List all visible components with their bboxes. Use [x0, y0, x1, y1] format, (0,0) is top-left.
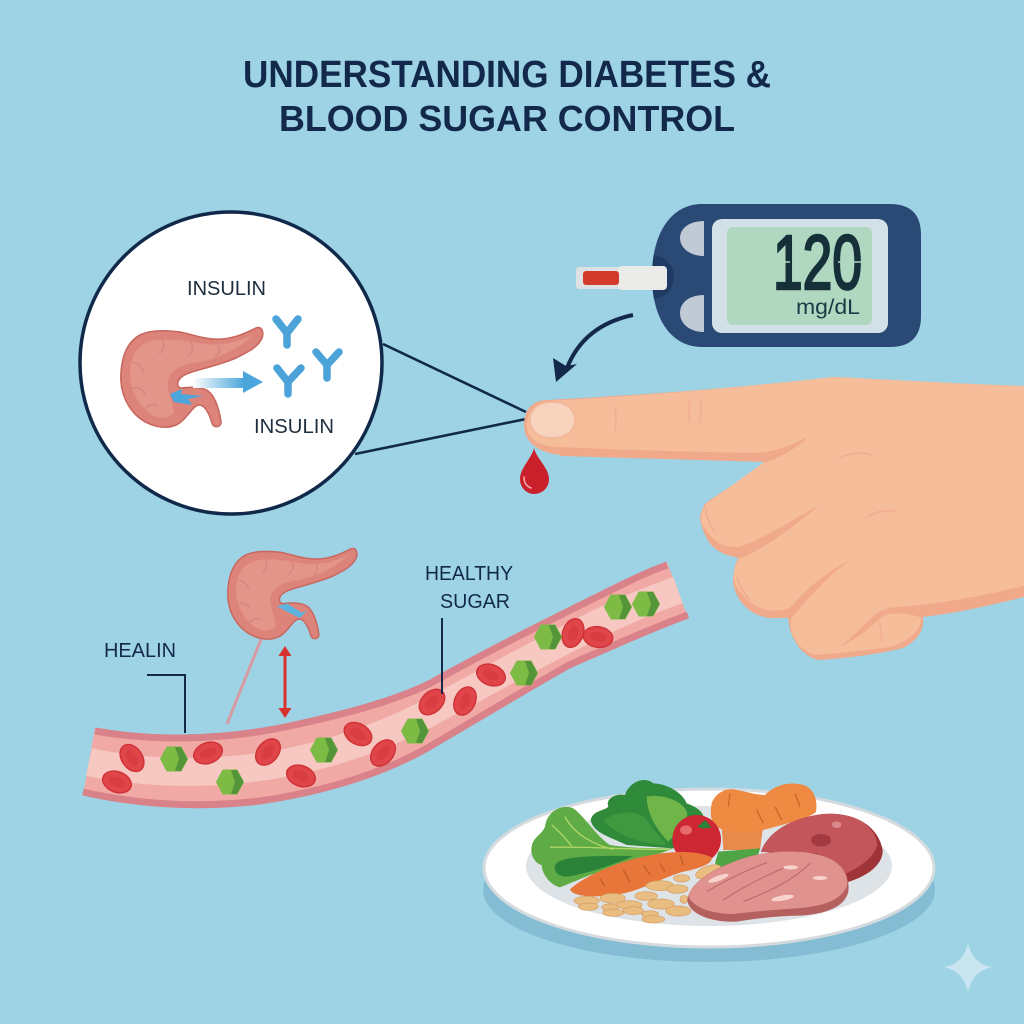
- tomato: [672, 815, 721, 864]
- glucose meter: [576, 204, 921, 347]
- green garnish: [715, 848, 760, 870]
- icon: pancreatic duct: [170, 389, 203, 405]
- pancreas connected to vessel: [227, 549, 357, 724]
- plate of food: [483, 780, 935, 962]
- label: HEALIN with leader: [104, 640, 185, 733]
- ham slice: [687, 852, 849, 922]
- glucose hexagons: [160, 592, 660, 794]
- plate well: [526, 806, 892, 926]
- icon: insulin molecules: [276, 319, 339, 394]
- title: BLOOD SUGAR CONTROL: [279, 98, 735, 139]
- hand creases: [560, 437, 923, 647]
- title: [243, 54, 771, 139]
- plate: [484, 789, 934, 947]
- meter buttons: [680, 221, 704, 332]
- meter screen: [712, 219, 888, 333]
- label: HEALTHY SUGAR with leader: SUGAR: [440, 591, 510, 613]
- icon: small pancreas: [228, 549, 357, 639]
- icon: pancreas: [121, 328, 263, 427]
- icon: sparkle: [944, 943, 992, 992]
- arrow: red double-headed: [278, 646, 292, 718]
- unit: mg/dL: mg/dL: [796, 296, 860, 319]
- front lettuce: [531, 807, 673, 887]
- label: insulin top: INSULIN: [187, 278, 266, 300]
- reading: 120: 120: [773, 220, 862, 306]
- dark meat slice: [761, 814, 883, 882]
- grains: [574, 862, 723, 923]
- title: UNDERSTANDING DIABETES &: [243, 54, 771, 96]
- back lettuce: [591, 780, 704, 848]
- meter strip port: [652, 255, 674, 299]
- front carrot: [570, 852, 712, 896]
- knuckle and joint lines: [615, 400, 895, 640]
- back carrots: [711, 784, 816, 850]
- magnifier circle: pancreas and insulin: [80, 212, 382, 514]
- food items: [531, 780, 883, 923]
- plate shadow: [483, 818, 935, 962]
- label: insulin bottom: INSULIN: [254, 416, 334, 438]
- connector lines: magnifier to fingertip: [355, 344, 526, 454]
- fingernail: [530, 402, 575, 438]
- arrow: insulin release: [193, 371, 263, 393]
- hand: [524, 377, 1024, 660]
- red blood cells: [99, 615, 615, 798]
- test strip: [576, 266, 667, 290]
- label: HEALTHY SUGAR with leader: [425, 563, 513, 694]
- icon: blood drop: [520, 448, 549, 494]
- vessel walls: [83, 565, 688, 805]
- connector: pancreas to vessel: [227, 637, 262, 724]
- arrow: meter to finger: [553, 315, 633, 382]
- label: HEALTHY SUGAR with leader: HEALTHY: [425, 563, 513, 585]
- blood vessel: [83, 562, 688, 808]
- label: HEALIN with leader: HEALIN: [104, 640, 176, 662]
